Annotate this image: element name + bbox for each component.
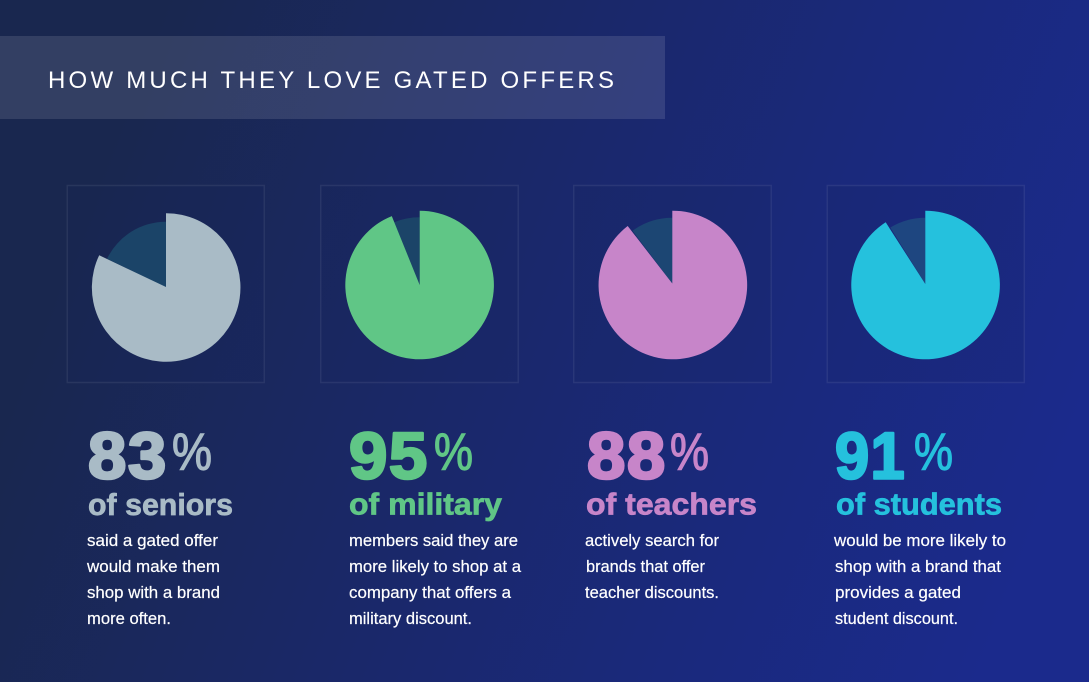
pie chart: military 95% (321, 186, 518, 382)
panel: military (321, 186, 522, 628)
statistic: 88%: 88 (587, 420, 667, 493)
pie chart: students 91% (827, 186, 1024, 382)
statistic: 83%: % (172, 424, 212, 482)
description: teachers (585, 531, 719, 602)
title: HOW MUCH THEY LOVE GATED OFFERS (48, 67, 614, 94)
description: students: would be more likely to (833, 531, 1006, 550)
description: seniors: shop with a brand (87, 583, 220, 602)
description: students: student discount. (835, 609, 958, 628)
statistic: 95%: % (434, 424, 473, 482)
pie chart: teachers 88% (574, 186, 771, 382)
statistic: 88% (587, 420, 709, 493)
description: seniors: said a gated offer (87, 531, 218, 550)
description: students (833, 531, 1006, 628)
panel: students (827, 186, 1024, 628)
description: students: shop with a brand that (835, 557, 1001, 576)
description: seniors: would make them (86, 557, 220, 576)
statistic: 95%: 95 (349, 420, 429, 493)
description: teachers: teacher discounts. (585, 583, 719, 602)
description: students: provides a gated (835, 583, 961, 602)
description: military: members said they are (349, 531, 518, 550)
description: military: company that offers a (349, 583, 512, 602)
pie chart: seniors 83% (67, 186, 264, 382)
heading: of students: of students (836, 486, 1002, 522)
panel: seniors (67, 186, 264, 628)
description: teachers: actively search for (585, 531, 719, 550)
title banner (0, 36, 665, 119)
description: seniors (86, 531, 220, 628)
statistic: 91% (835, 418, 953, 493)
statistic: 88%: % (670, 424, 709, 482)
statistic: 83%: 83 (88, 420, 168, 493)
description: military: more likely to shop at a (349, 557, 522, 576)
description: teachers: brands that offer (586, 557, 705, 576)
statistic: 95% (349, 420, 473, 493)
panel: teachers (574, 186, 771, 602)
heading: of teachers: of teachers (586, 486, 757, 522)
heading: of seniors: of seniors (88, 487, 233, 522)
description: seniors: more often. (87, 609, 171, 628)
statistic: 91%: % (914, 424, 953, 482)
statistic: 91%: 91 (835, 418, 906, 493)
description: military: military discount. (349, 609, 472, 628)
heading: of military: of military (349, 486, 503, 522)
statistic: 83% (88, 420, 212, 493)
description: military (349, 531, 522, 628)
